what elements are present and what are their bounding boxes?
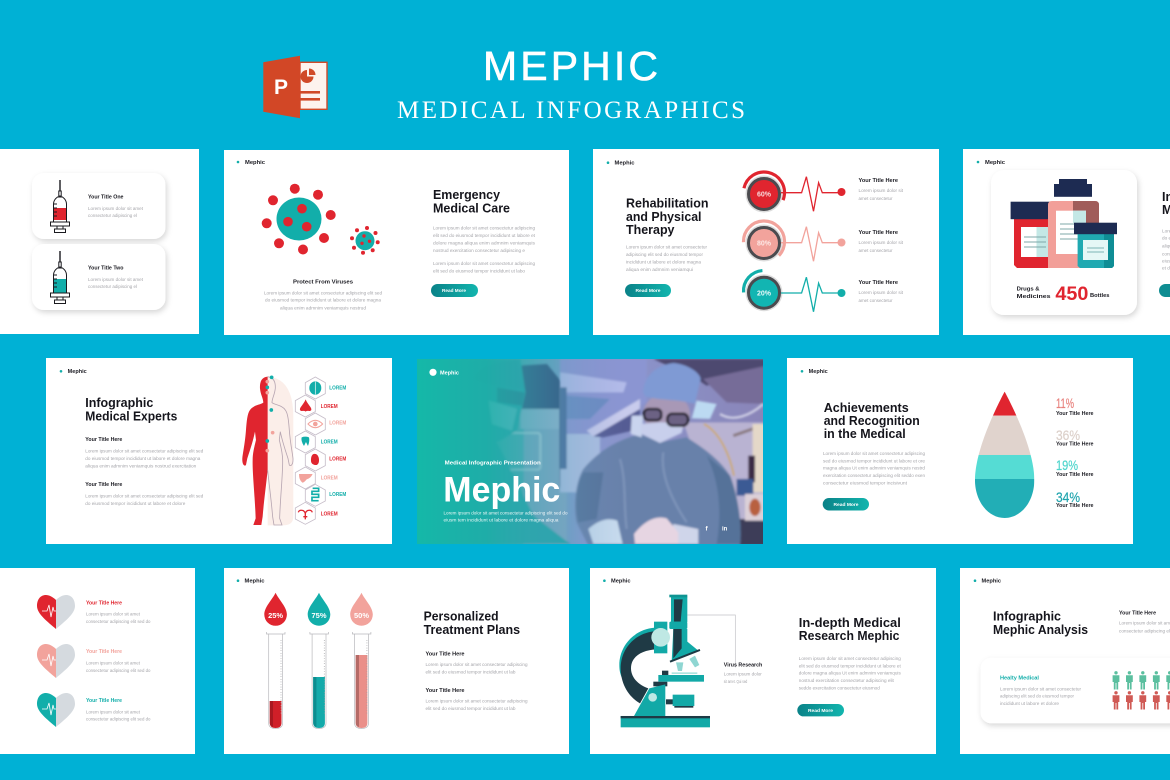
panel: rehabilitation: Read More [636,288,661,293]
panel: drugs and medicines [963,149,1170,335]
panel: emergency medical care [224,150,569,335]
panel: hearts: Lorem ipsum dolor sit amet [86,612,141,617]
panel: achievements: magna aliqua Ut enim admnim veniamquis nostrd [823,466,925,471]
legend: Your Title Here [1056,503,1094,509]
panel: rehabilitation: aliqua enim admnim veniamqui [626,267,693,272]
card: title two: consectetur adipiscing el [88,284,137,289]
chart: human body [242,375,325,525]
panel: emergency medical care: Protect From Viruses [293,280,353,286]
cover text: Mephic [443,471,560,510]
card: title two: Lorem ipsum dolor sit amet [88,277,144,282]
gauge: 80% [743,220,846,263]
panel: mephic analysis [960,568,1170,754]
hexagon icons [295,377,325,524]
cover text: eiusm tem incididunt ut labore et dolore magna aliqua [444,518,559,523]
subtitle: MEDICAL INFOGRAPHICS [397,97,745,124]
icon: PowerPoint logo: P [274,76,288,99]
labels: LOREM [329,457,346,463]
cover text: Medical Infographic Presentation [445,460,541,466]
panel: mephic analysis: incididunt ut labore et dolore [1000,701,1059,706]
panel: drugs and medicines: 450 [1055,284,1088,305]
panel: rehabilitation: Rehabilitation [626,196,708,210]
labels: LOREM [321,404,338,410]
panel: drugs and medicines: Medicines [1017,294,1051,300]
panel: test tubes: elit sed do eiusmod tempor incididunt ut lab [426,706,516,711]
cover text [443,460,728,532]
icon: small virus [350,226,380,255]
cover text: Lorem ipsum dolor sit amet consectetur adipiscing elit sed do [444,510,568,515]
icon: PowerPoint logo [263,56,327,118]
panel: test tubes: Your Title Here [426,652,465,658]
labels: LOREM [329,421,346,427]
panel: emergency medical care: Medical Care [433,201,510,215]
panel: mephic analysis: consectetur adipiscing el [1119,628,1170,633]
panel: microscope: elit sed do eiusmod tempor incididunt ut labore et [799,663,901,668]
card: title one: consectetur adipiscing el [88,213,137,218]
panel: mephic analysis: adipiscing elit sed do eiusmod tempor [1000,694,1074,699]
labels: LOREM [329,492,346,498]
panel: mephic analysis: Lorem ipsum dolor sit amet consectetur [1000,686,1081,691]
panel: emergency medical care: do eiusmod tempor incididunt ut labore et dolore magna [265,298,381,303]
panel: microscope: dolore magna aliqua Ut enim admnim veniamquis [799,671,901,676]
panel: emergency medical care: elit sed do eiusmod tempor incididunt ut labo [433,269,525,274]
gauge: 60%: 60% [757,192,772,199]
panel: rehabilitation: amet consectetur [858,196,893,201]
panel: emergency medical care: Lorem ipsum dolor sit amet consectetur adipiscing [433,261,535,266]
panel: medical experts: Lorem ipsum dolor sit amet consectetur adipiscing elit sed [85,494,204,499]
panel: emergency medical care: Lorem ipsum dolor sit amet consectetur adipiscing [433,226,535,231]
panel: rehabilitation [593,149,939,335]
panel: achievements: exercitation consectetur adipiscing elit seddo exen [823,473,925,478]
panel: rehabilitation: and Physical [626,210,702,224]
panel: achievements: Read More [834,502,859,507]
card: title two [32,244,166,310]
panel: achievements: consectetur eiusmod tempor incisivunt [823,480,908,485]
panel: microscope: Lorem ipsum dolor [724,672,762,677]
cover text: f [706,526,708,532]
panel: achievements: in the Medical [824,427,906,441]
panel: emergency medical care: elit sed do eiusmod tempor incididunt ut labore et [433,233,536,238]
panel: test tubes: Mephic [244,579,264,585]
panel: rehabilitation: amet consectetur [858,298,893,303]
panel: hearts: consectetur adipiscing elit sed do [86,668,151,673]
legend: 11% [1056,396,1074,411]
panel: microscope: nostrud exercitation consectetur adipiscing elit [799,678,894,683]
legend: 34% [1056,490,1080,505]
panel: medical experts: do eiusmod tempor incididunt ut labore et dolore [85,501,186,506]
tube: 75% [308,593,330,728]
gauge: 20% [742,269,846,313]
illustration: surgeon [560,359,767,546]
panel: medical experts: Lorem ipsum dolor sit amet consectetur adipiscing elit sed [85,449,204,454]
tube: 50%: 50% [354,611,369,620]
panel: microscope: Read More [808,708,834,713]
labels [321,386,346,518]
panel: rehabilitation: Lorem ipsum dolor sit [858,240,904,245]
panel: hearts: Your Title Here [86,649,122,655]
legend: Your Title Here [1056,442,1094,448]
panel: rehabilitation: Your Title Here [858,178,898,184]
panel: achievements: Mephic [809,369,828,375]
panel: emergency medical care: aliqua enim admnim veniamquis nostrud [280,305,366,310]
card: title one: Lorem ipsum dolor sit amet [88,206,144,211]
panel: rehabilitation: Therapy [626,223,675,237]
panel: emergency medical care: Emergency [433,188,500,202]
labels: LOREM [321,475,338,481]
panel: drugs and medicines: Bottles [1090,293,1110,299]
panel: rehabilitation: adipiscing elit sed do eiusmod tempor [626,252,703,257]
panel: mephic analysis: Your Title Here [1119,610,1156,616]
illustration: left doctor and equipment [489,359,570,544]
panel: mephic analysis: Mephic Analysis [993,623,1088,637]
panel: rehabilitation: amet consectetur [858,248,893,253]
panel: microscope: sit amet. Qui sed [724,679,748,684]
gauge: 20%: 20% [757,290,772,297]
panel: achievements: and Recognition [824,414,920,428]
title: MEPHIC [483,43,658,89]
panel: hearts: Lorem ipsum dolor sit amet [86,661,141,666]
chart: blood drop [973,390,1037,519]
tube: 25% [264,593,287,728]
icon: medicine bottles [1011,179,1117,268]
panel: medical experts: Your Title Here [85,482,122,488]
panel: microscope: In-depth Medical [799,616,901,630]
panel: achievements [787,358,1133,544]
panel: drugs and medicines: Mephic [985,160,1005,166]
panel: medical experts: aliqua enim admnim veniamquis nostrud exercitation [85,463,197,468]
panel: medical experts: Medical Experts [85,409,177,423]
panel: mephic analysis: Healty Medical [1000,676,1040,682]
panel: microscope: Lorem ipsum dolor sit amet consectetur adipiscing [799,656,901,661]
panel: hearts: Your Title Here [86,698,122,704]
panel: microscope: Research Mephic [799,629,900,643]
icon: heart teal [37,693,75,727]
chart: people pictogram [1113,671,1170,710]
panel: rehabilitation: Lorem ipsum dolor sit amet consectetur [626,245,707,250]
panel: emergency medical care: Read More [442,288,467,293]
labels: LOREM [321,440,338,446]
panel: test tubes: Lorem ipsum dolor sit amet consectetur adipiscing [426,662,528,667]
legend [1056,396,1094,509]
panel: achievements: Lorem ipsum dolor sit amet consectetur adipiscing [823,451,925,456]
panel: microscope [590,568,936,754]
tube: 25%: 25% [268,611,283,620]
panel: medical experts: Your Title Here [85,437,122,443]
panel: test tubes: elit sed do eiusmod tempor incididunt ut lab [426,669,516,674]
cover logo [429,369,459,376]
panel: cover photo [417,359,767,546]
card: title one: Your Title One [88,194,124,200]
panel: test tubes: Your Title Here [426,688,465,694]
panel: emergency medical care: Mephic [245,160,265,166]
cover text: in [722,526,728,532]
panel: test tubes: Personalized [424,610,499,624]
panel: hearts: Your Title Here [86,600,122,606]
panel: drugs and medicines: et d [1162,266,1170,271]
panel: rehabilitation: Lorem ipsum dolor sit [858,290,904,295]
legend: Your Title Here [1056,472,1094,478]
panel: drugs and medicines: Drugs & [1017,287,1040,293]
panel: mephic analysis: Infographic [993,610,1061,624]
panel: rehabilitation: incididunt ut labore et dolore magna [626,260,701,265]
panel: rehabilitation: Lorem ipsum dolor sit [858,188,904,193]
panel: test tubes: Lorem ipsum dolor sit amet consectetur adipiscing [426,699,528,704]
panel: rehabilitation: Your Title Here [858,280,898,286]
panel: rehabilitation: Your Title Here [858,230,898,236]
panel: medical experts [46,358,392,544]
panel: emergency medical care: dolore magna aliqua enim admnim veniamquis [433,241,536,246]
panel: syringes [0,149,199,334]
panel: test tubes: Treatment Plans [424,623,520,637]
panel: microscope: seddo exercitation consectetur eiusmod [799,686,880,691]
cover logo: Mephic [440,370,459,376]
panel: achievements: sed do eiusmod tempor incididunt ut labore et ore [823,458,925,463]
panel: rehabilitation: Mephic [614,160,634,166]
labels: LOREM [329,386,346,392]
panel: emergency medical care: nostrud exercitation consectetur adipiscing e [433,248,525,253]
panel: hearts [0,568,195,754]
panel: hearts: consectetur adipiscing elit sed do [86,717,151,722]
icon: large virus [262,184,336,254]
panel: hearts: Lorem ipsum dolor sit amet [86,709,141,714]
gauge: 60% [740,168,846,217]
panel: microscope: Mephic [611,579,630,585]
labels: LOREM [321,512,338,518]
panel: achievements: Achievements [824,401,909,415]
panel: medical experts: Infographic [85,396,153,410]
panel: mephic analysis: Mephic [982,579,1001,585]
legend: Your Title Here [1056,411,1094,417]
card: title two: Your Title Two [88,266,124,272]
icon: heart pink [37,644,75,678]
tube: 75%: 75% [311,611,327,620]
icon: microscope [619,595,735,727]
panel: microscope: Virus Research [724,662,762,668]
panel: medical experts: Mephic [68,369,87,375]
panel: hearts: consectetur adipiscing elit sed do [86,619,151,624]
legend: 19% [1056,458,1078,473]
card: title one [32,173,166,239]
panel: medical experts: do eiusmod tempor incididunt ut labore et dolore magna [85,456,201,461]
panel: test tubes [224,568,569,754]
gauge: 80%: 80% [757,241,772,248]
legend: 36% [1056,428,1080,443]
tube: 50% [350,593,373,728]
panel: emergency medical care: Lorem ipsum dolor sit amet consectetur adipiscing elit sed [264,290,382,295]
icon: heart red [37,595,75,629]
